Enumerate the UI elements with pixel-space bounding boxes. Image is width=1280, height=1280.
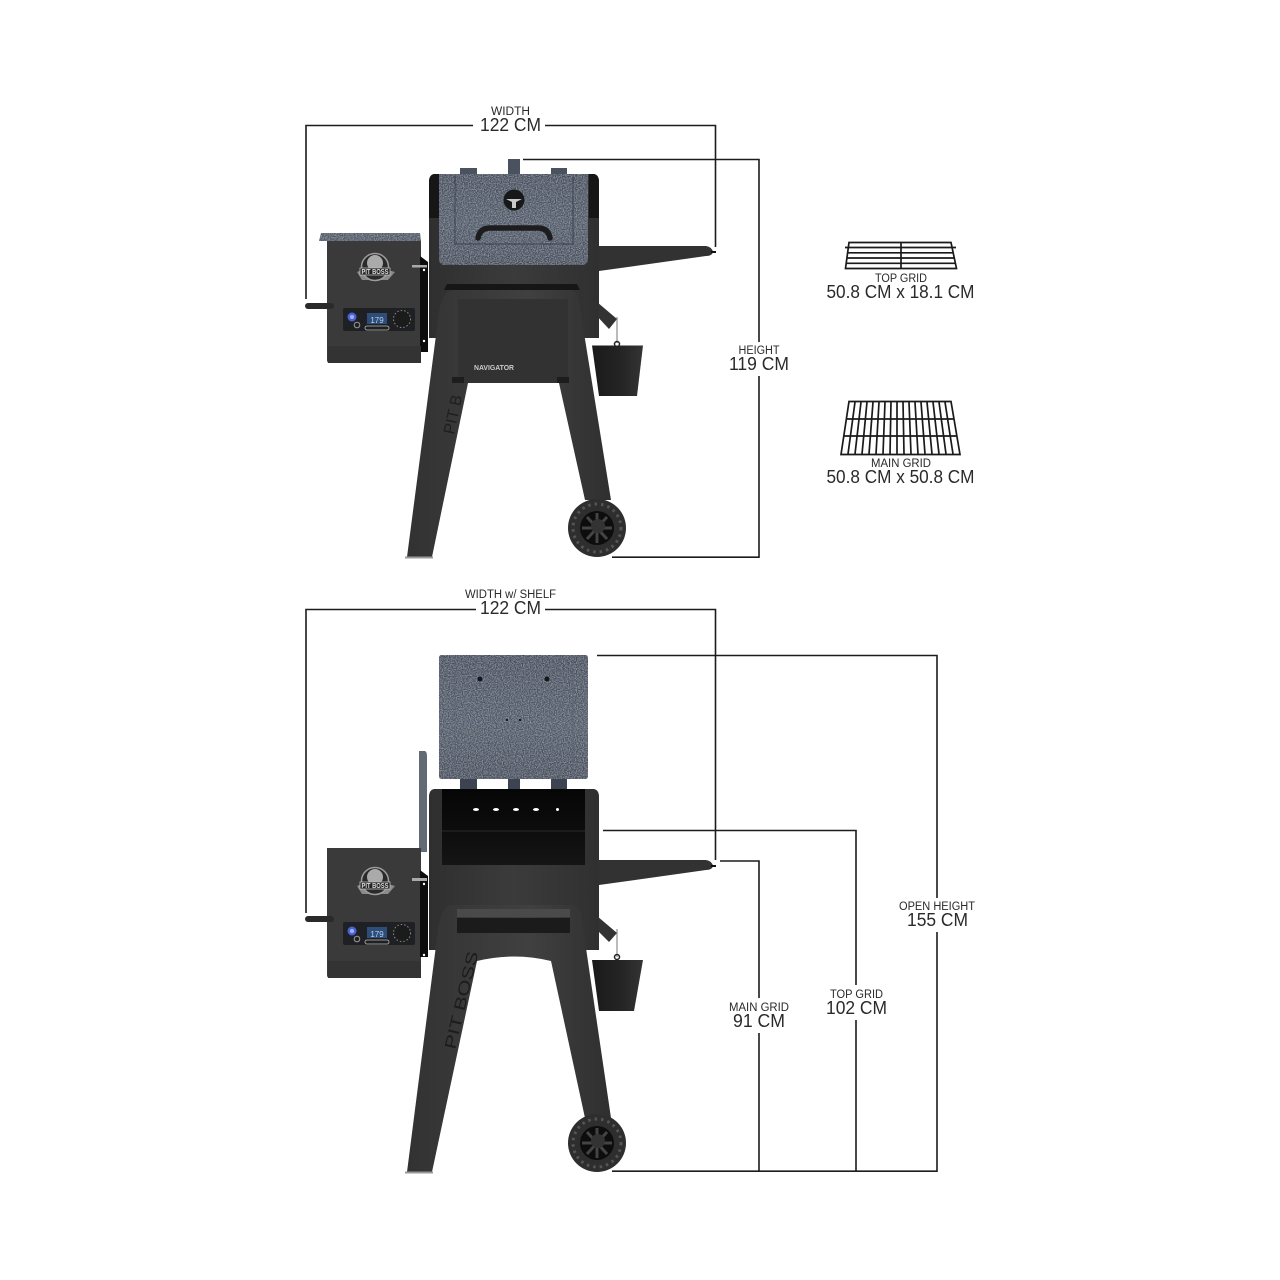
main grid label: 50.8 CM x 50.8 CM <box>826 467 974 487</box>
bucket hanger arm <box>595 302 617 329</box>
stove lower stripe <box>328 961 421 978</box>
control panel: 179 <box>370 316 384 325</box>
lid tabs and chimney <box>460 168 567 175</box>
logo emblem <box>357 254 395 280</box>
stove lower stripe <box>328 346 421 363</box>
front pellet hopper <box>327 241 421 363</box>
hopper latch bar <box>420 256 428 352</box>
control panel <box>343 922 415 945</box>
dimension lines: open grill <box>306 610 937 1171</box>
label: open height: 155 CM <box>907 910 968 930</box>
barrel interior <box>442 789 585 865</box>
label: height: 119 CM <box>729 354 789 374</box>
label: width with shelf: 122 CM <box>480 598 541 618</box>
label: top grid height <box>826 989 887 1018</box>
open blue lid <box>439 655 588 779</box>
barrel body <box>429 789 599 950</box>
front pellet hopper <box>327 848 421 978</box>
bucket <box>592 954 643 1011</box>
leg lettering: PIT BOSS <box>442 950 482 1051</box>
label: main grid height: 91 CM <box>733 1011 785 1031</box>
control panel <box>343 308 415 331</box>
label: width with shelf: WIDTH w/ SHELF <box>465 589 556 601</box>
legs and front panel <box>407 290 611 557</box>
NAVIGATOR badge: NAVIGATOR <box>474 363 515 372</box>
control panel: 179 <box>370 930 384 939</box>
logo emblem: PIT BOSS <box>362 269 389 276</box>
grill: open lid front view <box>308 655 716 1172</box>
hopper handle <box>308 303 331 309</box>
lid handle <box>478 228 550 238</box>
main grid label <box>826 458 974 487</box>
thermometer badge <box>504 190 524 210</box>
barrel body <box>429 174 599 338</box>
label: top grid height: 102 CM <box>826 998 887 1018</box>
label: width with shelf <box>465 589 556 618</box>
legs and arch <box>407 905 611 1172</box>
raised hopper lid <box>419 751 427 852</box>
top grid label: TOP GRID <box>875 273 927 285</box>
label: width <box>480 106 541 135</box>
label: height: HEIGHT <box>738 345 780 357</box>
logo emblem: PIT BOSS <box>362 883 389 890</box>
label: open height: OPEN HEIGHT <box>899 901 975 913</box>
label: main grid height <box>729 1002 789 1031</box>
hopper handle <box>308 916 331 922</box>
bucket <box>592 342 643 396</box>
main grid icon <box>841 402 960 454</box>
wheel <box>568 1114 626 1172</box>
top grid icon <box>845 242 956 268</box>
bucket hanger arm <box>595 916 617 942</box>
label: open height <box>899 901 975 930</box>
label: width: WIDTH <box>491 106 530 118</box>
blue lid <box>439 174 588 265</box>
leg lettering: PIT B <box>441 393 466 436</box>
top grid label: 50.8 CM x 18.1 CM <box>826 282 974 302</box>
grill: closed lid front view <box>308 159 716 558</box>
label: top grid height: TOP GRID <box>830 989 883 1001</box>
hopper latch bar <box>420 870 428 957</box>
side shelf <box>599 246 713 271</box>
shelf knob <box>711 251 716 253</box>
top grid label <box>826 273 974 302</box>
logo emblem <box>357 868 395 894</box>
lid hinges <box>460 779 567 789</box>
label: main grid height: MAIN GRID <box>729 1002 789 1014</box>
dimension lines: closed grill <box>306 126 759 557</box>
wheel <box>568 499 626 557</box>
label: width: 122 CM <box>480 115 541 135</box>
main grid label: MAIN GRID <box>871 458 931 470</box>
label: height <box>729 345 789 374</box>
side shelf <box>599 860 713 885</box>
